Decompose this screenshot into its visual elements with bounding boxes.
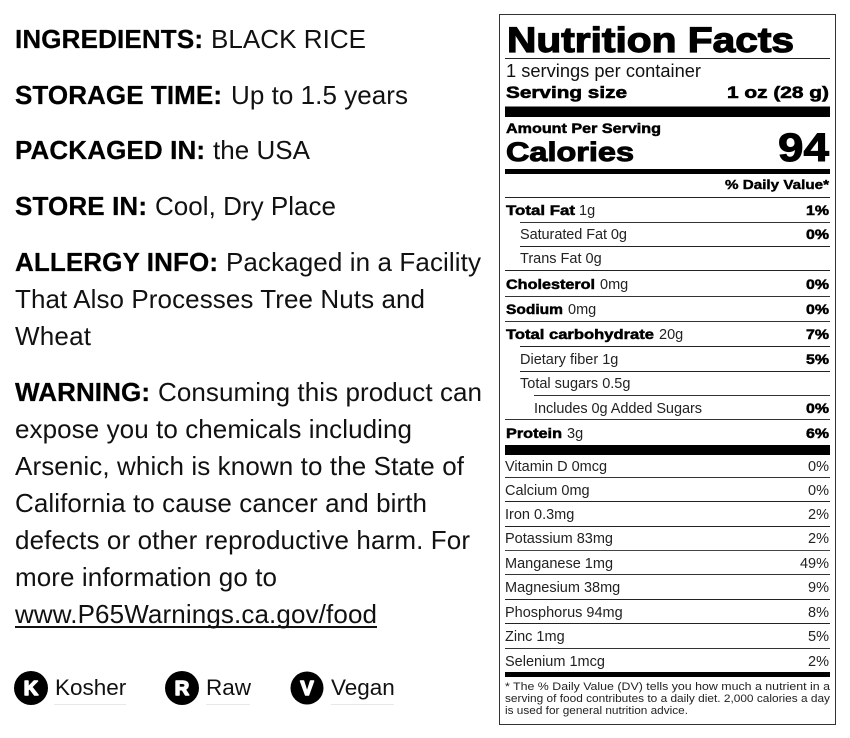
store in xyxy=(15,191,336,221)
row: sodium: 0mg xyxy=(568,302,596,318)
row: vitamin d: Vitamin D 0mcg xyxy=(505,459,607,475)
row: cholesterol: 0mg xyxy=(600,277,628,293)
row: iron xyxy=(505,507,829,523)
row: vitamin d xyxy=(505,459,829,475)
badge: raw: Raw xyxy=(206,675,252,700)
row: protein: Protein xyxy=(506,425,562,441)
row: manganese: Manganese 1mg xyxy=(505,556,613,572)
footnote: * The % Daily Value (DV) tells you how much a nutrient in a xyxy=(505,681,831,693)
packaged in: PACKAGED IN: xyxy=(15,135,205,165)
warning: California to cause cancer and birth xyxy=(15,488,427,518)
panel: nutrition facts xyxy=(500,14,836,724)
badge: raw xyxy=(165,671,252,705)
row: zinc: 5% xyxy=(808,629,829,645)
text block: product information xyxy=(14,24,482,629)
icon: V: V xyxy=(300,678,314,700)
ingredients: BLACK RICE xyxy=(211,24,366,54)
row: sodium xyxy=(506,301,830,318)
row: total carbohydrate xyxy=(506,326,830,343)
row: saturated fat: Saturated Fat 0g xyxy=(520,227,627,243)
row: saturated fat xyxy=(520,226,830,243)
store in: Cool, Dry Place xyxy=(155,191,336,221)
row: total fat: 1% xyxy=(806,202,830,218)
row: phosphorus: Phosphorus 94mg xyxy=(505,605,623,621)
warning: more information go to xyxy=(15,562,277,592)
row: added sugars xyxy=(534,400,830,417)
panel border xyxy=(500,14,836,724)
storage time xyxy=(15,80,408,110)
row: selenium: Selenium 1mcg xyxy=(505,654,605,670)
footnote xyxy=(505,681,831,717)
calories xyxy=(506,126,830,170)
row: cholesterol xyxy=(506,276,830,293)
row: calcium: 0% xyxy=(808,483,829,499)
row: dietary fiber: 5% xyxy=(806,351,830,367)
row: zinc: Zinc 1mg xyxy=(505,629,565,645)
allergy info: Wheat xyxy=(15,321,92,351)
row: iron: 2% xyxy=(808,507,829,523)
warning: www.P65Warnings.ca.gov/food xyxy=(14,599,377,629)
icon: R: R xyxy=(175,678,190,700)
ingredients: INGREDIENTS: xyxy=(15,24,203,54)
row: cholesterol: Cholesterol xyxy=(506,276,595,292)
row: potassium xyxy=(505,531,829,547)
store in: STORE IN: xyxy=(15,191,147,221)
heading: nutrition facts: Nutrition Facts xyxy=(507,21,794,60)
badge: kosher: Kosher xyxy=(55,675,127,700)
amount per serving: Amount Per Serving xyxy=(506,120,661,136)
daily value header: % Daily Value* xyxy=(725,177,830,192)
row: total fat: Total Fat xyxy=(506,202,575,218)
row: manganese xyxy=(505,556,829,572)
row: trans fat: Trans Fat 0g xyxy=(520,251,602,267)
allergy info: That Also Processes Tree Nuts and xyxy=(15,284,425,314)
row: total fat: 1g xyxy=(579,203,595,219)
badge: vegan xyxy=(290,672,395,705)
badge: kosher xyxy=(14,671,127,705)
icon: K: K xyxy=(24,678,39,700)
row: zinc xyxy=(505,629,829,645)
row: magnesium xyxy=(505,580,829,596)
serving size xyxy=(506,83,829,102)
row: saturated fat: 0% xyxy=(806,226,830,242)
warning xyxy=(14,377,482,629)
row: cholesterol: 0% xyxy=(806,276,830,292)
serving size: 1 oz (28 g) xyxy=(727,83,829,102)
row: selenium: 2% xyxy=(808,654,829,670)
row: magnesium: Magnesium 38mg xyxy=(505,580,620,596)
row: added sugars: 0% xyxy=(806,400,830,416)
warning: expose you to chemicals including xyxy=(15,414,412,444)
row: total carbohydrate: Total carbohydrate xyxy=(506,326,654,342)
badge: vegan: Vegan xyxy=(331,675,395,700)
storage time: Up to 1.5 years xyxy=(231,80,408,110)
calories: 94 xyxy=(778,126,830,170)
row: added sugars: Includes 0g Added Sugars xyxy=(534,401,702,417)
footnote: serving of food contributes to a daily diet. 2,000 calories a day xyxy=(505,693,831,705)
packaged in xyxy=(15,135,311,165)
allergy info xyxy=(15,247,481,351)
row: total fat xyxy=(506,202,830,219)
row: potassium: 2% xyxy=(808,531,829,547)
footnote: is used for general nutrition advice. xyxy=(505,705,688,717)
row: phosphorus xyxy=(505,605,829,621)
row: sodium: 0% xyxy=(806,301,830,317)
row: total carbohydrate: 20g xyxy=(659,327,683,343)
row: vitamin d: 0% xyxy=(808,459,829,475)
row: sodium: Sodium xyxy=(506,301,563,317)
row: iron: Iron 0.3mg xyxy=(505,507,574,523)
row: potassium: Potassium 83mg xyxy=(505,531,613,547)
row: protein: 6% xyxy=(806,425,830,441)
row: phosphorus: 8% xyxy=(808,605,829,621)
warning: Consuming this product can xyxy=(158,377,482,407)
serving size: Serving size xyxy=(506,83,627,102)
allergy info: Packaged in a Facility xyxy=(226,247,481,277)
warning: Arsenic, which is known to the State of xyxy=(15,451,465,481)
row: calcium: Calcium 0mg xyxy=(505,483,590,499)
packaged in: the USA xyxy=(213,135,311,165)
row: total carbohydrate: 7% xyxy=(806,326,830,342)
row: protein xyxy=(506,425,830,442)
warning: WARNING: xyxy=(15,377,150,407)
warning: defects or other reproductive harm. For xyxy=(15,525,470,555)
row: protein: 3g xyxy=(567,426,583,442)
allergy info: ALLERGY INFO: xyxy=(15,247,218,277)
row: calcium xyxy=(505,483,829,499)
ingredients xyxy=(15,24,366,54)
row: magnesium: 9% xyxy=(808,580,829,596)
calories: Calories xyxy=(506,137,634,167)
row: manganese: 49% xyxy=(800,556,829,572)
row: selenium xyxy=(505,654,829,670)
row: total sugars: Total sugars 0.5g xyxy=(520,376,630,392)
row: dietary fiber: Dietary fiber 1g xyxy=(520,352,618,368)
row: dietary fiber xyxy=(520,351,830,368)
storage time: STORAGE TIME: xyxy=(15,80,222,110)
servings per container: 1 servings per container xyxy=(506,61,701,81)
